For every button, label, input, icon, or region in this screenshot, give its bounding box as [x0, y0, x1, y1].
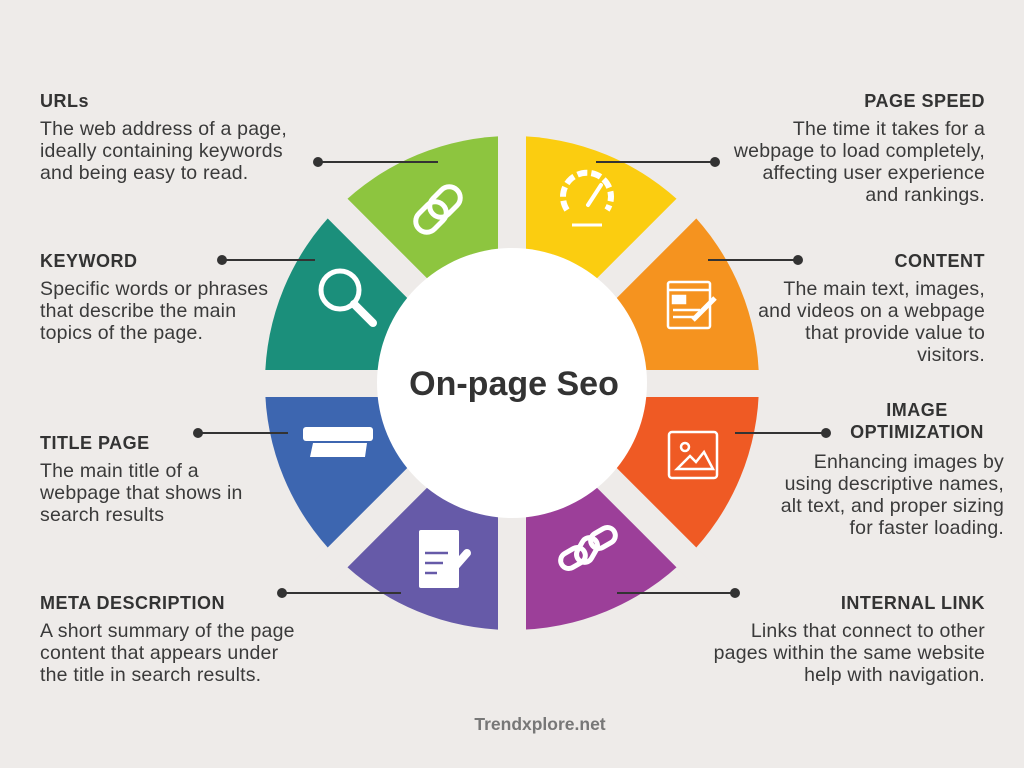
- icon: content editor: [668, 282, 715, 328]
- text: internal link: pages within the same website: [714, 642, 985, 664]
- text: image optimization body: Enhancing images by: [814, 451, 1004, 473]
- text: page speed: PAGE SPEED: [864, 91, 985, 111]
- segment: page speed: [512, 136, 687, 383]
- segment: urls: [337, 136, 512, 383]
- text: page speed: and rankings.: [865, 184, 985, 206]
- text: content: that provide value to: [805, 322, 985, 344]
- segment: image optimization: [512, 383, 759, 558]
- text: keyword: [40, 251, 268, 344]
- text: content: CONTENT: [894, 251, 985, 271]
- text: meta description: the title in search results.: [40, 664, 261, 686]
- text: image optimization body: alt text, and proper sizing: [781, 495, 1004, 517]
- segment: title page: [265, 383, 512, 558]
- text: URLs: ideally containing keywords: [40, 140, 283, 162]
- segment: internal link: [512, 383, 687, 630]
- text: title page: TITLE PAGE: [40, 433, 150, 453]
- text: content: The main text, images,: [783, 278, 985, 300]
- text: keyword: Specific words or phrases: [40, 278, 268, 300]
- icon: image: [669, 432, 717, 478]
- text: image optimization heading: [850, 400, 984, 442]
- text: internal link: INTERNAL LINK: [841, 593, 985, 613]
- icon: speedometer: [563, 173, 611, 225]
- icon: chain: [558, 525, 618, 571]
- text: keyword: KEYWORD: [40, 251, 138, 271]
- text: page speed: webpage to load completely,: [734, 140, 985, 162]
- text: meta description: content that appears under: [40, 642, 278, 664]
- text: title page: The main title of a: [40, 460, 199, 482]
- text: meta description: A short summary of the page: [40, 620, 295, 642]
- text: title page: webpage that shows in: [40, 482, 243, 504]
- text: internal link: Links that connect to other: [751, 620, 985, 642]
- text: internal link: [714, 593, 985, 686]
- text: content: and videos on a webpage: [758, 300, 985, 322]
- footer: source: Trendxplore.net: [474, 714, 606, 734]
- text: image optimization body: [781, 451, 1004, 539]
- text: keyword: that describe the main: [40, 300, 236, 322]
- text: image optimization heading: IMAGE: [886, 400, 948, 420]
- icon: document with pencil: [419, 530, 467, 588]
- text: title page: search results: [40, 504, 164, 526]
- text: meta description: META DESCRIPTION: [40, 593, 225, 613]
- text: URLs: and being easy to read.: [40, 162, 248, 184]
- icon: link (urls): [411, 182, 465, 237]
- connector lines: [194, 158, 830, 597]
- icon: title bar: [303, 427, 373, 457]
- text: image optimization heading: OPTIMIZATION: [850, 422, 984, 442]
- text: page speed: [734, 91, 985, 206]
- center circle: [377, 248, 647, 518]
- text: image optimization body: using descriptive names,: [785, 473, 1004, 495]
- text: page speed: The time it takes for a: [793, 118, 985, 140]
- text: URLs: [40, 91, 287, 184]
- segment: content: [512, 208, 759, 383]
- text: meta description: [40, 593, 295, 686]
- segment: meta description: [337, 383, 512, 630]
- text: content: visitors.: [917, 344, 985, 366]
- text: keyword: topics of the page.: [40, 322, 203, 344]
- text: content: [758, 251, 985, 366]
- text: image optimization body: for faster loading.: [850, 517, 1004, 539]
- text: URLs: URLs: [40, 91, 89, 111]
- text: internal link: help with navigation.: [804, 664, 985, 686]
- icon: magnifier key: [321, 271, 373, 323]
- segment: keyword: [265, 208, 512, 383]
- text: URLs: The web address of a page,: [40, 118, 287, 140]
- title: On-page Seo: On-page Seo: [409, 365, 619, 403]
- text: title page: [40, 433, 243, 526]
- text: page speed: affecting user experience: [762, 162, 985, 184]
